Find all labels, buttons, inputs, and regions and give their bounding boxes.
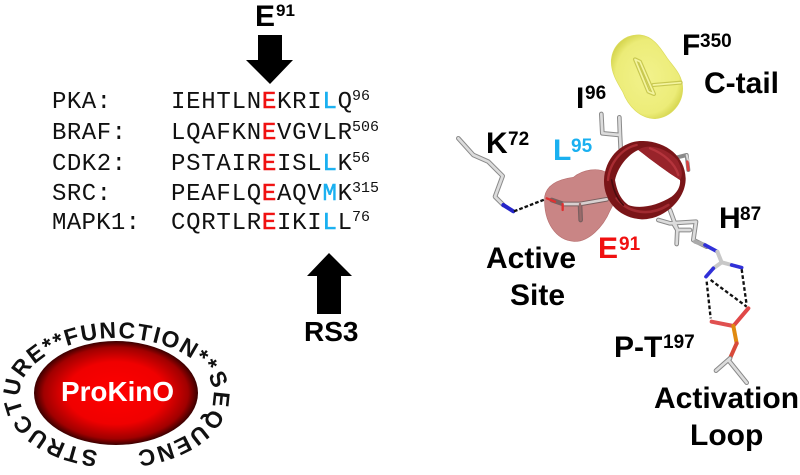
- logo: ProKinO: [3, 322, 230, 466]
- helix ring: [604, 141, 686, 219]
- label: L95: 95: [571, 136, 593, 157]
- sequence alignment: [52, 88, 379, 237]
- row: SRC: PEAFLQEAQVMK: [171, 181, 353, 208]
- label: I96: 96: [585, 83, 606, 104]
- row: PKA: 96: [352, 88, 370, 105]
- structure: upper molecule: [458, 35, 707, 247]
- row: MAPK1: CQRTLREIKILL: [171, 210, 352, 237]
- label: E91 red: 91: [619, 234, 641, 255]
- stick: F350 side chain: [635, 59, 681, 94]
- hydrogen bond: [514, 199, 545, 211]
- helix top band: [638, 147, 682, 180]
- label: Activation Loop: Loop: [690, 419, 763, 452]
- phosphothreonine: [712, 308, 748, 383]
- stick: I96: [601, 114, 621, 148]
- row: PKA: PKA:: [52, 89, 111, 116]
- label: E91 red: [598, 232, 641, 265]
- label: L95: L: [553, 134, 571, 167]
- stick: red tip: [673, 155, 688, 170]
- logo name: ProKinO: [61, 376, 174, 407]
- row: MAPK1: [52, 209, 370, 237]
- label: E91: [255, 0, 295, 33]
- label: Activation Loop: [654, 382, 799, 452]
- label: E91: 91: [276, 1, 295, 20]
- structure: activation loop sticks: [695, 242, 748, 383]
- label: I96: [576, 82, 606, 115]
- arrow: up to RS3: [307, 253, 352, 314]
- surface: E91 pink: [545, 170, 615, 241]
- logo oval: [34, 341, 198, 445]
- label: K72: 72: [508, 129, 529, 150]
- row: SRC: [52, 180, 379, 208]
- label: K72: K: [486, 127, 508, 160]
- label: C-tail: C-tail: [704, 67, 779, 100]
- row: CDK2: PSTAIREISLLK: [171, 151, 353, 178]
- row: CDK2: CDK2:: [52, 151, 126, 178]
- row: CDK2: 56: [352, 150, 370, 167]
- stick: K72: [458, 138, 513, 211]
- row: SRC: 315: [352, 180, 379, 197]
- row: BRAF: LQAFKNEVGVLR: [171, 120, 352, 147]
- label: E91: E: [255, 0, 275, 33]
- label: H87: H: [719, 202, 741, 235]
- row: BRAF: BRAF:: [52, 120, 126, 147]
- label: I96: I: [576, 82, 584, 115]
- stick: E91 side chain: [547, 198, 607, 220]
- label: P-T197: P-T: [614, 331, 662, 364]
- row: SRC: SRC:: [52, 181, 111, 208]
- label: Activation Loop: Activation: [654, 382, 799, 415]
- label: F350: F: [682, 29, 700, 62]
- row: PKA: [52, 88, 370, 116]
- hydrogen bonds: [707, 269, 747, 318]
- label: F350: [682, 29, 732, 62]
- label: RS3: RS3: [304, 316, 358, 347]
- label: Active Site: Site: [510, 279, 565, 312]
- row: PKA: IEHTLNEKRILQ: [171, 89, 352, 116]
- label: E91 red: E: [598, 232, 618, 265]
- arrow: down to E91: [246, 35, 293, 84]
- ring text: STRUCTURE**FUNCTION**SEQUENC: [3, 322, 230, 466]
- label: H87: [719, 202, 761, 235]
- row: BRAF: 506: [352, 119, 379, 136]
- row: MAPK1: MAPK1:: [52, 210, 140, 237]
- stick: lower side chains: [658, 210, 707, 247]
- guanidinium group: [695, 242, 742, 277]
- row: MAPK1: 76: [352, 209, 370, 226]
- helix body: [604, 141, 686, 219]
- label: F350: 350: [700, 31, 732, 52]
- row: BRAF: [52, 119, 379, 147]
- label: P-T197: [614, 331, 695, 364]
- label: Active Site: Active: [486, 242, 576, 275]
- row: CDK2: [52, 150, 370, 178]
- label: K72: [486, 127, 529, 160]
- label: P-T197: 197: [663, 332, 695, 353]
- label: H87: 87: [740, 204, 761, 225]
- label: Active Site: [486, 242, 576, 312]
- helix highlights: [608, 145, 678, 212]
- surface: F350 yellow: [611, 35, 683, 119]
- label: L95: [553, 134, 593, 167]
